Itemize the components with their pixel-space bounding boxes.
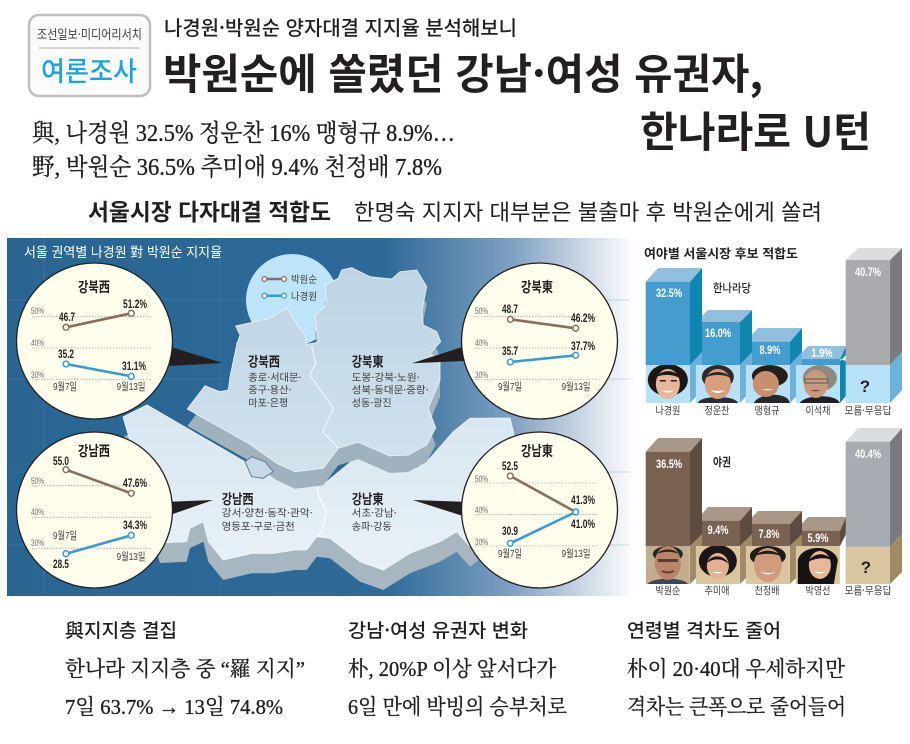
text block: 與지지층 결집: 7일 63.7% → 13일 74.8% — [65, 695, 283, 719]
label: 야권: 야권 — [713, 454, 731, 470]
bar: 박영선 5.9%: 5.9% — [808, 531, 829, 545]
region label: 강남西 — [222, 488, 313, 533]
photo: 정운찬 — [696, 365, 740, 403]
text block: 강남·여성 유권자 변화: 강남·여성 유권자 변화 — [348, 616, 528, 643]
subheadline: ruling and opposition leaders — [32, 120, 455, 181]
line chart circle: 강남東: 40% — [475, 505, 488, 515]
line chart circle: 강남西: 50% — [31, 476, 44, 486]
text block: 與지지층 결집: 與지지층 결집 — [65, 616, 177, 643]
map: river island — [245, 457, 273, 478]
badge: 여론조사: 여론조사 — [41, 50, 137, 89]
bar chart: 한나라당 — [646, 248, 902, 403]
bar: 이석채 1.9%: 1.9% — [812, 346, 833, 360]
region label: 강남西: 영등포·구로·금천 — [222, 518, 295, 533]
bar: 모름·무응답 40.7%: ? — [860, 377, 870, 396]
line chart circle: 강북西: 강북西 — [78, 277, 110, 297]
line chart circle: 강북西: 35.2 — [58, 349, 74, 361]
text block: 연령별 격차도 줄어: 연령별 격차도 줄어 — [627, 616, 781, 643]
subheadline: ruling and opposition leaders: 與, 나경원 32.5% 정운찬 16% 맹형규 8.9%… — [32, 120, 455, 147]
line chart circle: 강북東: 강북東 — [521, 277, 553, 297]
line chart circle: 강북東: 50% — [475, 306, 488, 316]
text block: 강남·여성 유권자 변화: 朴, 20%P 이상 앞서다가 — [348, 657, 557, 681]
pointer wedges — [170, 347, 464, 516]
region label: 강남東: 송파·강동 — [352, 518, 392, 533]
bar: 정운찬 16.0% — [696, 310, 752, 403]
region label: 강북西: 중구·용산· — [248, 382, 291, 396]
region label: 강남東: 강남東 — [352, 488, 384, 508]
bar: 추미애 9.4%: 9.4% — [708, 523, 729, 537]
line chart circle: 강북西: 50% — [31, 306, 44, 316]
line chart circle: 강남東: 41.0% — [571, 519, 595, 531]
region label: 강북東: 도봉·강북·노원· — [352, 369, 420, 384]
line chart circle: 강남東 — [462, 432, 618, 588]
text block: 연령별 격차도 줄어 — [627, 616, 846, 719]
photo: 천정배 — [746, 546, 790, 584]
candidate names: 야권 — [656, 583, 892, 598]
line chart circle: 강북東: 30% — [475, 370, 488, 380]
bar: 나경원 32.5%: 32.5% — [656, 286, 682, 300]
line chart circle: 강북東: 37.7% — [571, 341, 595, 353]
line chart circle: 강남東: 52.5 — [502, 461, 518, 473]
bar: 맹형규 8.9% — [746, 328, 802, 403]
text block: 與지지층 결집 — [65, 616, 305, 719]
line chart circle: 강북西: 31.1% — [122, 361, 146, 373]
region label: 강북西: 종로·서대문· — [248, 369, 301, 384]
legend circle — [246, 254, 338, 346]
bar: 모름·무응답 40.7% — [846, 248, 902, 403]
label: 한나라당: 한나라당 — [713, 280, 751, 296]
subheadline: ruling and opposition leaders: 野, 박원순 36.5% 추미애 9.4% 천정배 7.8% — [32, 154, 442, 181]
line chart circle: 강북西: 9월13일 — [116, 380, 146, 393]
map: north of the river — [187, 268, 441, 489]
bar: 천정배 7.8% — [746, 511, 802, 584]
main headline — [163, 41, 871, 160]
badge: 여론조사: 조선일보·미디어리서치 — [37, 24, 142, 43]
bar: 박원순 36.5%: 36.5% — [656, 457, 682, 471]
line chart circle: 강북西: 30% — [31, 370, 44, 380]
line chart circle: 강남西: 강남西 — [78, 441, 110, 461]
bar: 박원순 36.5% — [646, 438, 702, 584]
region label: 강북西 — [248, 351, 301, 410]
bar: 맹형규 8.9%: 8.9% — [760, 343, 781, 357]
line chart circle: 강남東: 9월13일 — [562, 547, 590, 560]
line chart circle: 강남東: 강남東 — [521, 441, 553, 461]
bar: 추미애 9.4% — [696, 507, 752, 584]
region label: 강북東: 성동·광진 — [352, 395, 392, 410]
bar: 모름·무응답 40.4%: ? — [861, 558, 871, 577]
line chart circle: 강남西: 30% — [31, 538, 44, 548]
text block: 강남·여성 유권자 변화: 6일 만에 박빙의 승부처로 — [348, 695, 567, 719]
section title — [88, 193, 822, 227]
line chart circle: 강남西: 9월7일 — [53, 529, 77, 542]
region label: 강북西: 마포·은평 — [248, 395, 288, 410]
region label: 강북東: 강북東 — [352, 351, 384, 371]
bar chart: 야권 — [646, 428, 902, 584]
photo: 박영선 — [796, 546, 840, 584]
line chart circle: 강남東: 30.9 — [502, 526, 518, 538]
candidate names: 한나라당: 모름·무응답 — [844, 403, 892, 418]
line chart circle: 강북西: 46.7 — [59, 312, 75, 324]
main headline: 박원순에 쏠렸던 강남·여성 유권자, — [163, 41, 763, 102]
line chart circle: 강북西: 9월7일 — [53, 380, 77, 393]
bar: 모름·무응답 40.7%: 40.7% — [855, 265, 881, 279]
line chart circle: 강북東: 9월13일 — [562, 380, 590, 393]
region label: 강북東: 성북·동대문·중랑· — [352, 382, 429, 396]
region label: 강남西: 강서·양천·동작·관악· — [222, 504, 313, 520]
region label: 강북東 — [352, 351, 429, 410]
main headline: 한나라로 U턴 — [640, 99, 871, 160]
candidate names: 한나라당 — [656, 403, 892, 418]
candidate names: 한나라당: 나경원 — [656, 403, 680, 418]
photo: 박원순 — [646, 546, 690, 584]
badge: 여론조사 — [29, 15, 150, 96]
kicker headline: 나경원·박원순 양자대결 지지율 분석해보니 — [164, 12, 517, 41]
candidate names: 야권: 천정배 — [754, 583, 780, 598]
bar: 정운찬 16.0%: 16.0% — [705, 326, 731, 340]
line chart circle: 강남西: 55.0 — [53, 456, 69, 468]
line chart circle: 강북東: 9월7일 — [498, 380, 522, 393]
candidate names: 야권: 추미애 — [704, 583, 730, 598]
line chart circle: 강남東: 50% — [475, 474, 488, 484]
chart title: party candidates: 여야별 서울시장 후보 적합도 — [644, 243, 798, 262]
line chart circle: 강남西: 28.5 — [53, 559, 69, 571]
candidate names: 한나라당: 맹형규 — [754, 403, 780, 418]
panel: Seoul map — [7, 238, 635, 596]
candidate names: 야권: 박영선 — [806, 583, 830, 598]
region label: 강남東: 서초·강남· — [352, 504, 397, 520]
legend circle: 나경원 — [291, 288, 317, 303]
text block: 강남·여성 유권자 변화 — [348, 616, 567, 719]
line chart circle: 강북東: 48.7 — [502, 304, 518, 316]
photo: 맹형규 — [746, 365, 790, 403]
bar: 이석채 1.9% — [796, 346, 846, 403]
photo: 추미애 — [696, 546, 740, 584]
text block: 與지지층 결집: 한나라 지지층 중 “羅 지지” — [65, 657, 305, 681]
line chart circle: 강남西: 9월13일 — [116, 550, 146, 563]
section title: 한명숙 지지자 대부분은 불출마 후 박원순에게 쏠려 — [354, 195, 822, 227]
candidate names: 야권: 박원순 — [656, 583, 681, 598]
line chart circle: 강남西: 47.6% — [123, 478, 147, 490]
photo: 나경원 — [646, 365, 690, 403]
text block: 연령별 격차도 줄어: 격차는 큰폭으로 줄어들어 — [627, 695, 846, 719]
line chart circle: 강남西 — [16, 432, 172, 588]
line chart circle: 강북西 — [16, 263, 172, 419]
candidate names: 야권: 모름·무응답 — [844, 583, 892, 598]
candidate names: 한나라당: 이석채 — [806, 403, 830, 418]
line chart circle: 강남東: 30% — [475, 537, 488, 547]
line chart circle: 강북東: 35.7 — [502, 346, 518, 358]
line chart circle: 강북西: 40% — [31, 338, 44, 348]
photo: 이석채 — [796, 365, 840, 403]
legend circle: 박원순 — [291, 271, 317, 286]
region label: 강북西: 강북西 — [248, 351, 280, 371]
bar: 나경원 32.5% — [646, 268, 702, 403]
map: south of the river — [123, 405, 530, 590]
region label: 강남東 — [352, 488, 397, 533]
bar: 모름·무응답 40.4% — [846, 428, 902, 584]
bar: 박영선 5.9% — [796, 517, 846, 546]
bar: 천정배 7.8%: 7.8% — [758, 527, 780, 541]
line chart circle: 강남東: 9월7일 — [498, 547, 522, 560]
line chart circle: 강북東: 40% — [475, 338, 488, 348]
section title: 서울시장 다자대결 적합도 — [88, 193, 331, 227]
text block: 연령별 격차도 줄어: 朴이 20·40대 우세하지만 — [627, 657, 846, 681]
map header: 서울 권역별 나경원 對 박원순 지지율 — [24, 241, 222, 261]
line chart circle: 강남西: 34.3% — [123, 520, 147, 532]
line chart circle: 강남東: 41.3% — [571, 495, 595, 507]
region label: 강남西: 강남西 — [222, 488, 254, 508]
line chart circle: 강북東: 46.2% — [571, 313, 595, 325]
line chart circle: 강북西: 51.2% — [123, 299, 147, 311]
candidate names: 한나라당: 정운찬 — [704, 403, 730, 418]
bar: 모름·무응답 40.4%: 40.4% — [855, 447, 881, 461]
line chart circle: 강북東 — [462, 263, 618, 419]
line chart circle: 강남西: 40% — [31, 507, 44, 517]
